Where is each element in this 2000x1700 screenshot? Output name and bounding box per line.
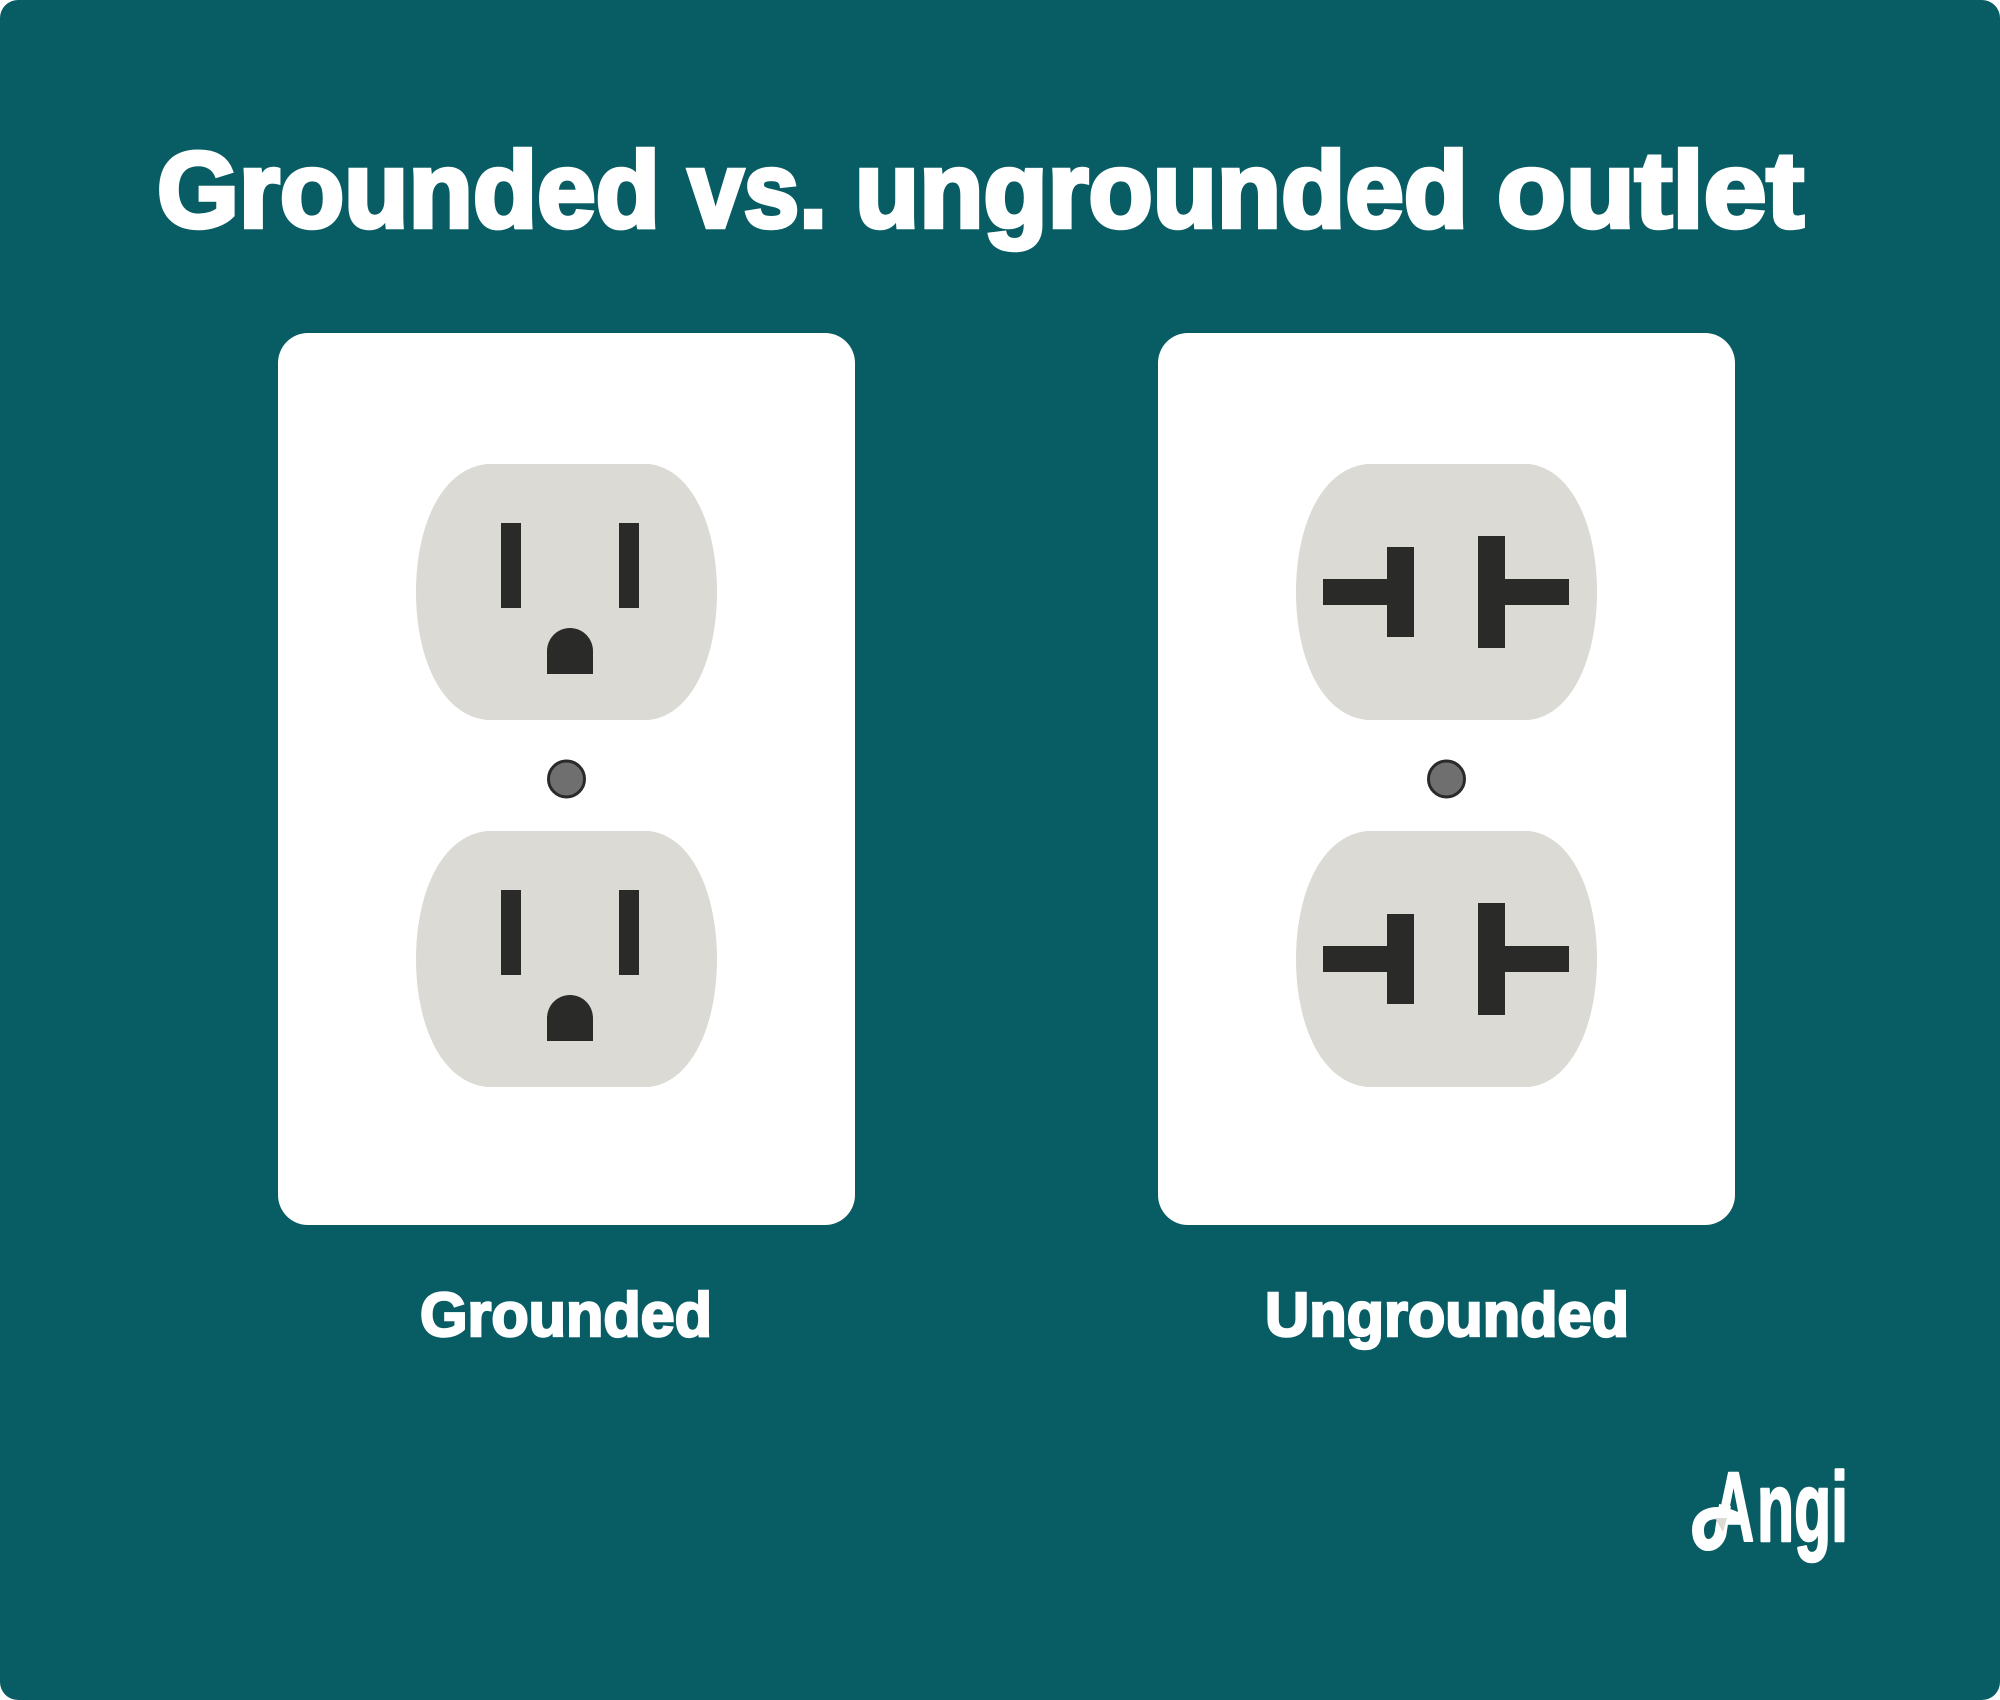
logo: Angi	[1698, 1452, 1848, 1562]
screw	[1428, 761, 1464, 797]
lower receptacle	[416, 831, 717, 1087]
title	[157, 129, 1804, 250]
panel: grounded outlet plate	[278, 333, 855, 1225]
panel: ungrounded outlet plate	[1158, 333, 1735, 1225]
wall plate	[1158, 333, 1735, 1225]
title: ungrounded	[855, 129, 1468, 250]
wall plate	[278, 333, 855, 1225]
title: outlet	[1497, 129, 1804, 250]
label: ungrounded: Ungrounded	[1265, 1281, 1629, 1350]
screw	[548, 761, 584, 797]
title: vs.	[688, 129, 827, 250]
label: grounded: Grounded	[420, 1281, 712, 1350]
upper receptacle	[416, 464, 717, 720]
logo: Angi: ngi	[1757, 1452, 1848, 1562]
lower receptacle	[1296, 831, 1597, 1087]
logo: Angi: A	[1713, 1452, 1754, 1562]
upper receptacle	[1296, 464, 1597, 720]
title: Grounded	[157, 129, 660, 250]
